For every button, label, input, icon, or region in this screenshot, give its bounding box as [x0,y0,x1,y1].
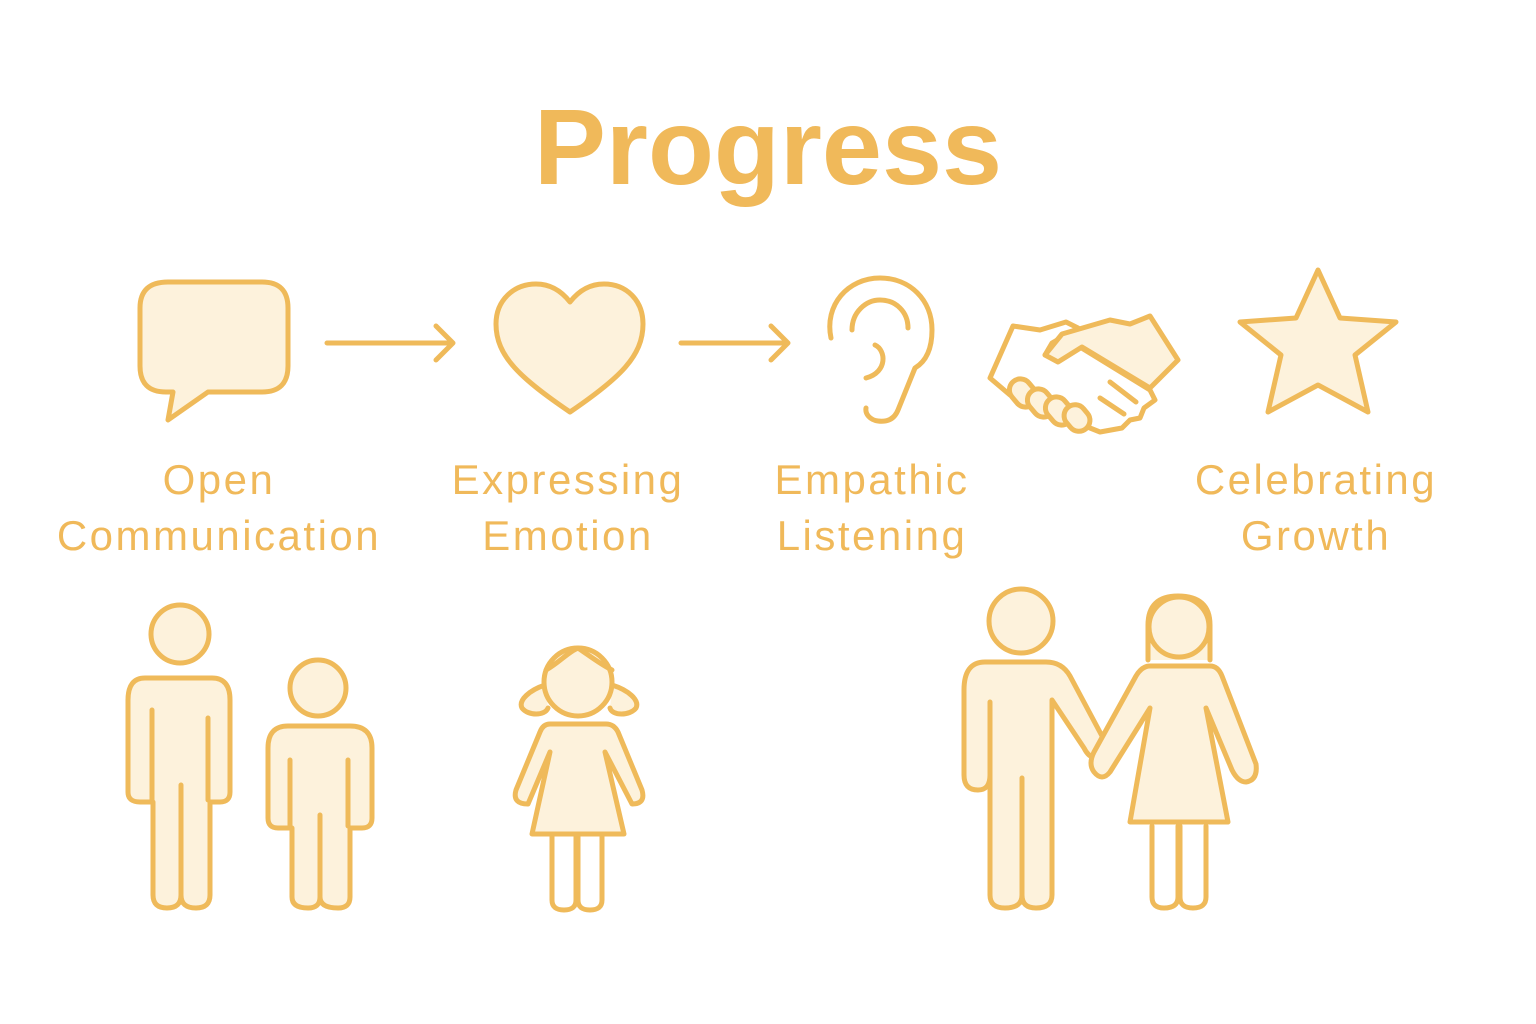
figure: woman [1091,596,1256,908]
label: empathic listening: Listening [777,512,967,559]
label: celebrating growth [1195,456,1437,559]
figure: child [268,660,372,908]
label: open communication: Open [163,456,275,503]
label: celebrating growth: Celebrating [1195,456,1437,503]
figure: man [964,589,1104,908]
figure: girl [515,648,643,910]
label: open communication: Communication [57,512,381,559]
arrow 1 [327,326,453,360]
label: empathic listening: Empathic [774,456,970,503]
label: expressing emotion: Emotion [482,512,654,559]
title: Progress [534,86,1002,207]
label: expressing emotion [452,456,684,559]
arrow 2 [681,326,788,360]
label: open communication [57,456,381,559]
label: celebrating growth: Growth [1241,512,1391,559]
icon: star [1240,270,1396,412]
label: expressing emotion: Expressing [452,456,684,503]
icon: heart [496,284,643,412]
icon: speech bubble [140,282,288,420]
label: empathic listening [774,456,970,559]
icon: handshake [990,316,1178,436]
figure: adult [128,605,230,908]
icon: ear [830,278,932,421]
